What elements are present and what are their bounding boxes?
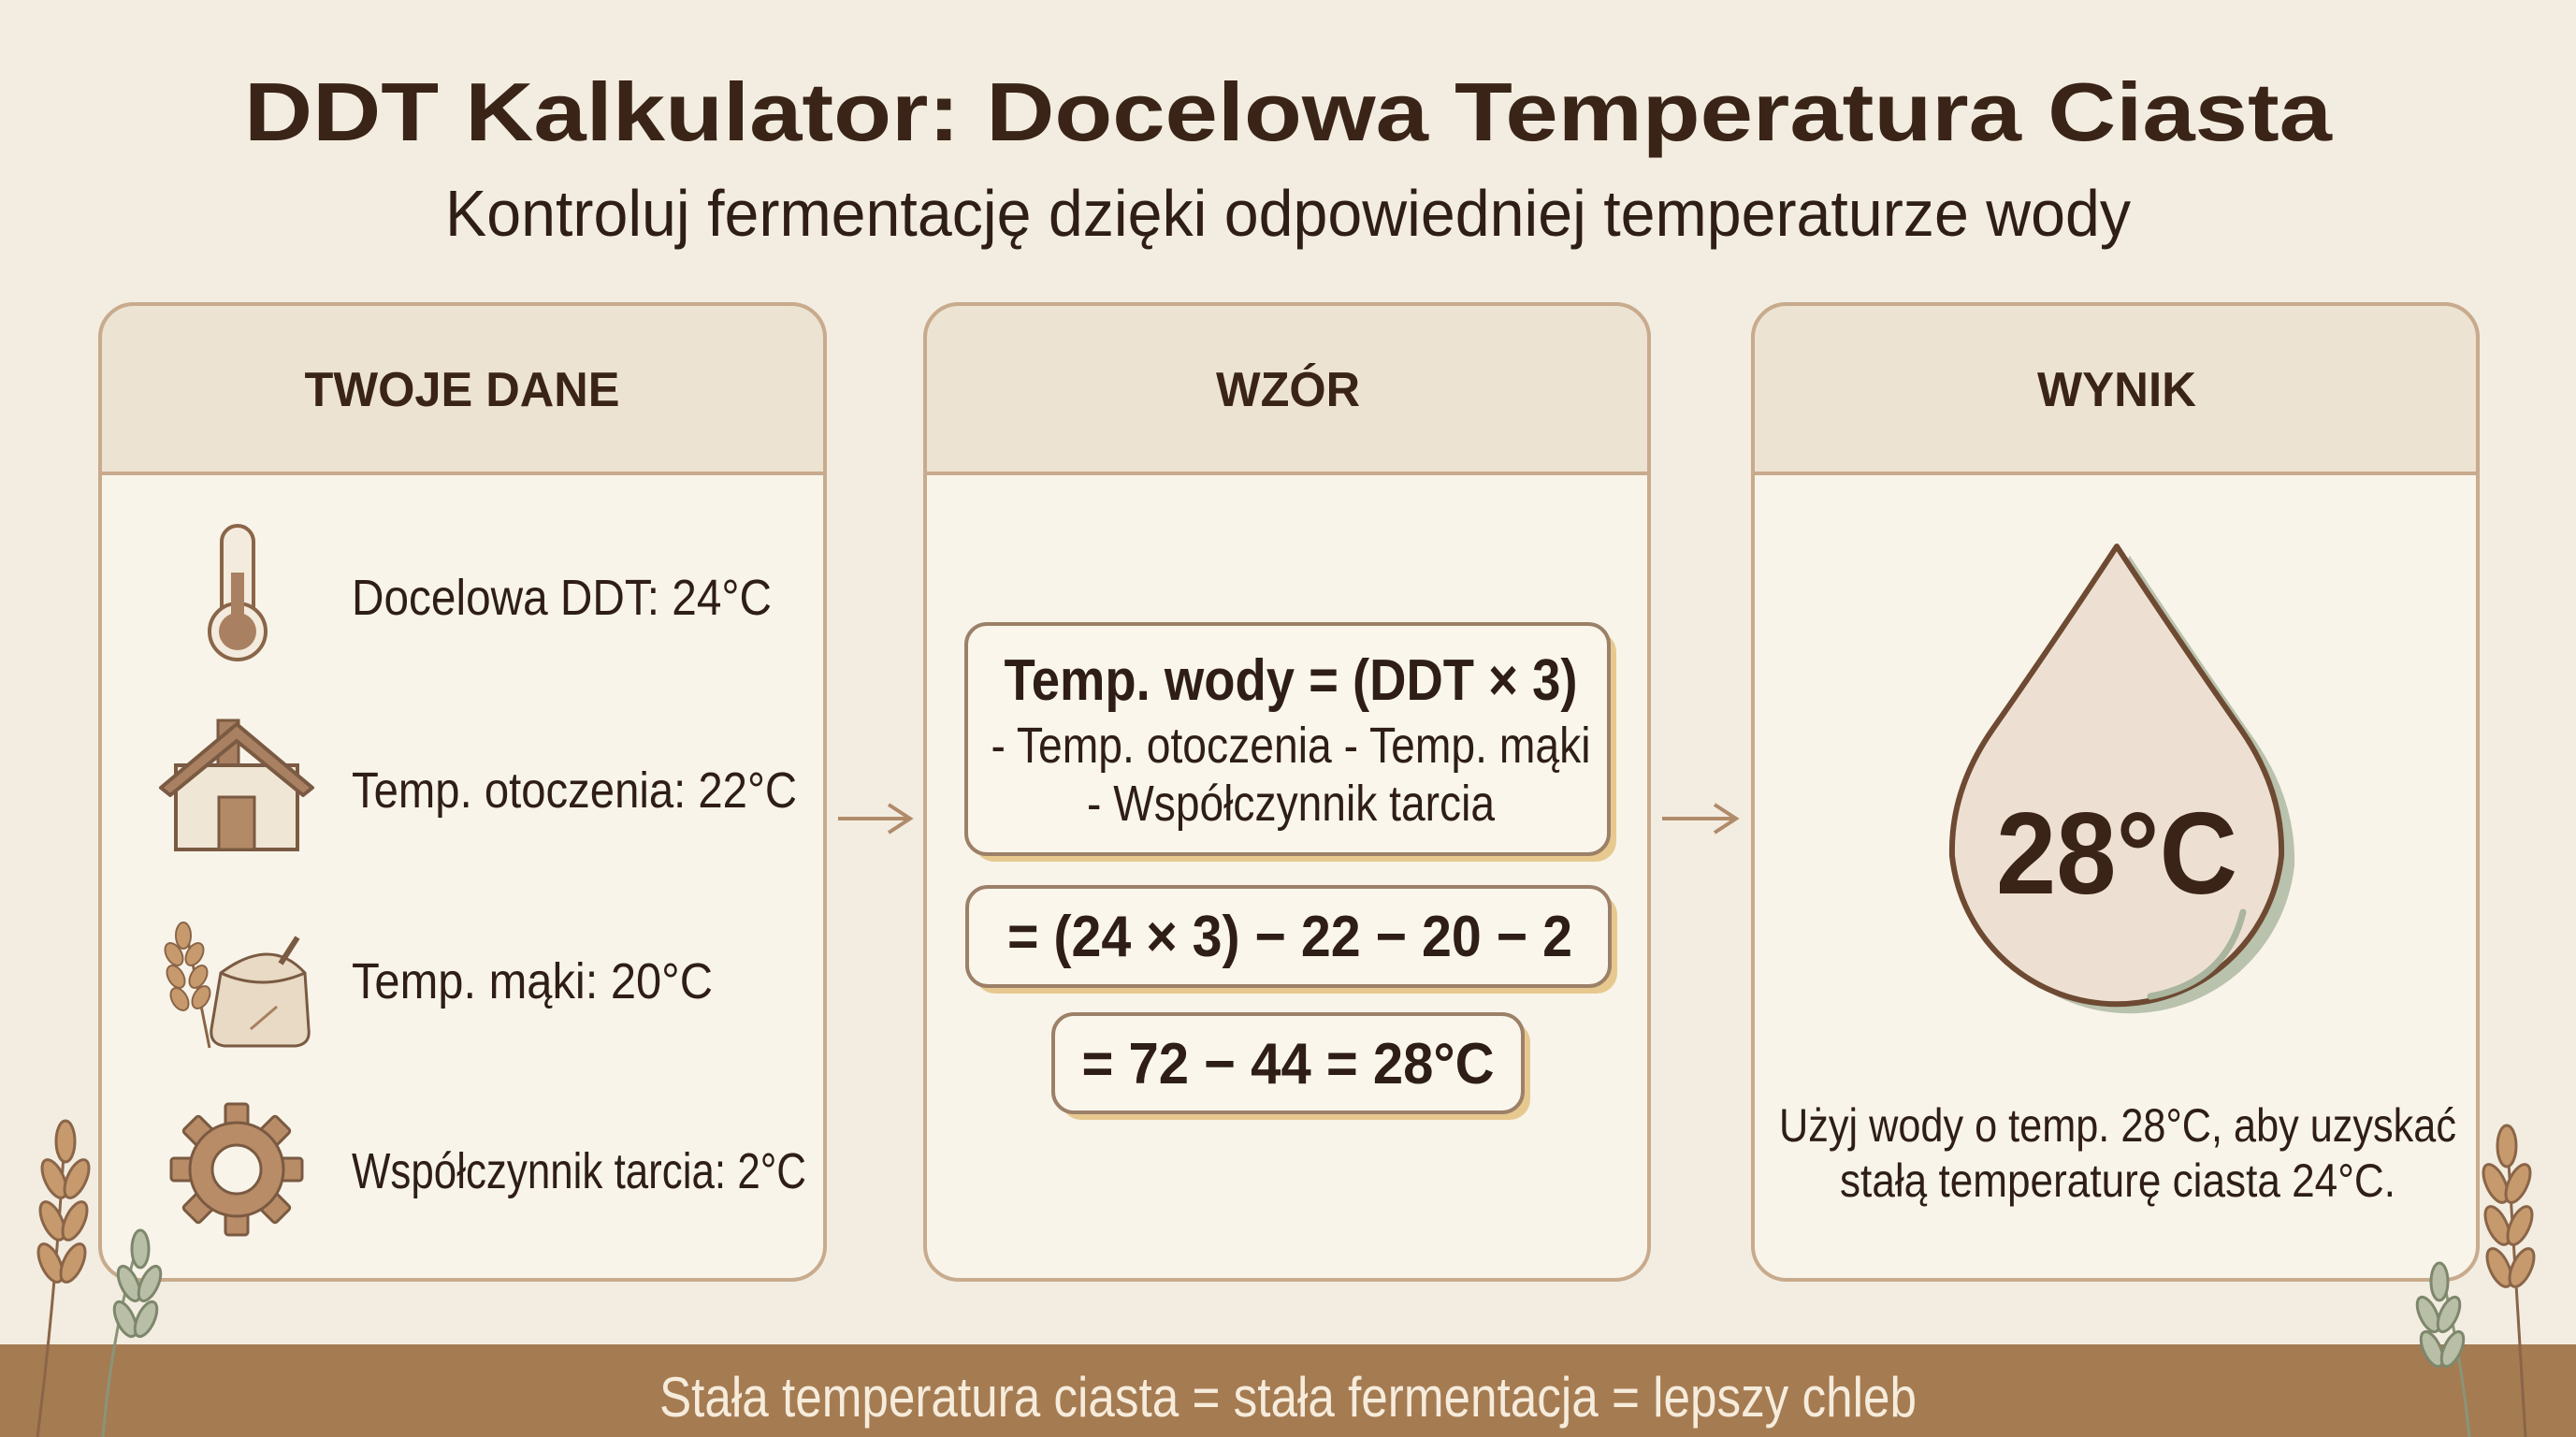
heading: twoje dane: TWOJE DANE (305, 363, 619, 417)
wheat decoration left (34, 1121, 166, 1437)
substitution box: = (24 × 3) − 22 − 20 − 2 (1007, 905, 1572, 969)
arrow: left to middle (838, 805, 910, 833)
caption: stałą temperaturę ciasta 24°C. (1840, 1154, 2395, 1207)
substitution box (967, 887, 1617, 994)
text: maka: Temp. mąki: 20°C (352, 953, 713, 1009)
caption (1779, 1099, 2456, 1207)
arrow: middle to right (1662, 805, 1736, 833)
icon: house (161, 720, 312, 849)
panel: twoje dane (100, 304, 825, 1280)
result box: = 72 − 44 = 28°C (1081, 1032, 1495, 1096)
footer band: Stała temperatura ciasta = stała fermentacja = lepszy chleb (659, 1366, 1917, 1429)
result box (1053, 1014, 1530, 1120)
icon: flour (162, 922, 309, 1048)
text: otoczenie: Temp. otoczenia: 22°C (352, 762, 797, 819)
title: DDT Kalkulator: Docelowa Temperatura Ciasta (244, 65, 2333, 158)
heading: wynik: WYNIK (2037, 363, 2196, 417)
formula box: - Współczynnik tarcia (1087, 776, 1496, 832)
formula box: Temp. wody = (DDT × 3) (1005, 648, 1577, 713)
heading: wzór: WZÓR (1216, 363, 1360, 417)
formula box: - Temp. otoczenia - Temp. mąki (991, 718, 1590, 774)
panel: wzór (925, 304, 1649, 1280)
formula box (966, 624, 1616, 862)
panel: wynik (1753, 304, 2478, 1280)
caption: Użyj wody o temp. 28°C, aby uzyskać (1779, 1099, 2456, 1152)
subtitle: Kontroluj fermentację dzięki odpowiedniej temperaturze wody (445, 177, 2131, 250)
icon: water drop (1952, 546, 2294, 1013)
text: tarcie: Współczynnik tarcia: 2°C (352, 1143, 806, 1199)
text: ddt: Docelowa DDT: 24°C (352, 570, 772, 626)
icon: water drop: 28°C (1996, 790, 2237, 919)
icon: gear (171, 1104, 302, 1235)
wheat decoration right (2412, 1125, 2539, 1437)
icon: thermometer (210, 526, 266, 660)
footer band (0, 1344, 2576, 1437)
